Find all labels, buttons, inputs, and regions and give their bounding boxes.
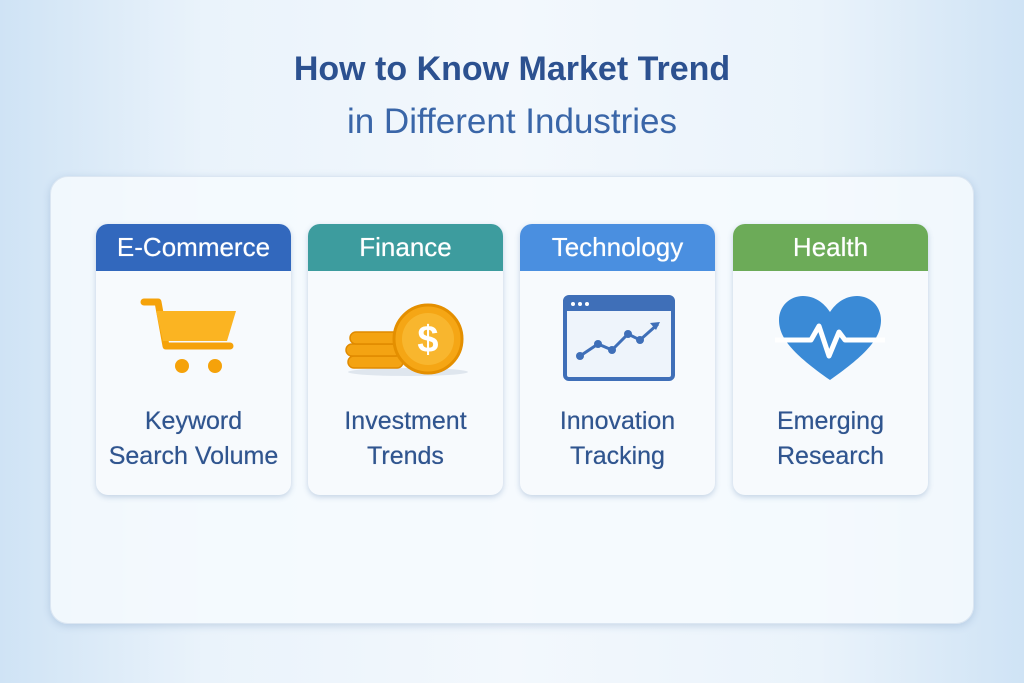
card: e-commerce: [96, 224, 291, 495]
icon: coins: $: [417, 319, 439, 361]
card: finance: [308, 224, 503, 495]
text: emerging research: [777, 407, 884, 470]
header: e-commerce: E-Commerce: [117, 232, 270, 262]
header: technology: [520, 224, 715, 271]
text: keyword search volume: [109, 407, 278, 470]
text: investment trends: Trends: [367, 442, 444, 470]
title: How to Know Market Trend: [294, 50, 730, 88]
icon: coins: [345, 304, 468, 376]
text: innovation tracking: [560, 407, 675, 470]
icon: heart pulse: [779, 296, 881, 380]
text: emerging research: Emerging: [777, 407, 884, 435]
icon: shopping cart: [140, 298, 236, 373]
header: health: [733, 224, 928, 271]
text: investment trends: Investment: [344, 407, 467, 435]
header: health: Health: [793, 232, 868, 262]
card: health: [733, 224, 928, 495]
text: innovation tracking: Innovation: [560, 407, 675, 435]
text: emerging research: Research: [777, 442, 884, 470]
header: e-commerce: [96, 224, 291, 271]
header: finance: [308, 224, 503, 271]
text: innovation tracking: Tracking: [570, 442, 665, 470]
text: keyword search volume: Keyword: [145, 407, 242, 435]
subtitle: in Different Industries: [347, 102, 677, 141]
header: finance: Finance: [359, 232, 452, 262]
text: investment trends: [344, 407, 467, 470]
card: technology: [520, 224, 715, 495]
header: technology: Technology: [552, 232, 683, 262]
icon: chart window: [563, 295, 675, 381]
panel: main container: [50, 176, 974, 624]
text: keyword search volume: Search Volume: [109, 442, 278, 470]
